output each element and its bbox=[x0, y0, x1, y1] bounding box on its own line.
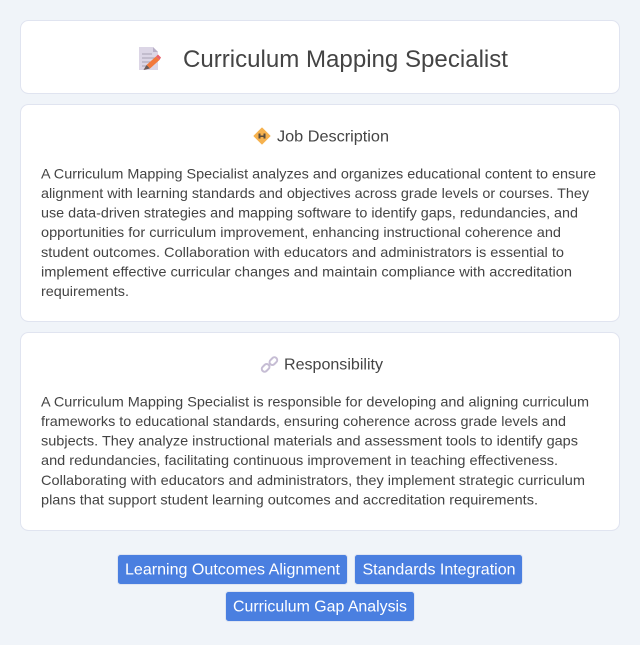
text block: job description: requirements. bbox=[41, 283, 129, 299]
text block: job description: use data-driven strategies and mapping software to identify gaps, redundancies, and bbox=[41, 205, 578, 221]
text block: job description: implement effective curricular changes and maintain compliance with accreditation bbox=[41, 263, 572, 279]
text block: job description: A Curriculum Mapping Specialist analyzes and organizes educational content to ensure bbox=[41, 165, 596, 181]
text block: job description: alignment with learning standards and objectives across grade levels or courses. They bbox=[41, 185, 589, 201]
panel: responsibility bbox=[20, 332, 620, 530]
heading: job description: Job Description bbox=[277, 128, 389, 146]
text block: responsibility: subjects. They analyze instructional materials and assessment tools to identify gaps bbox=[41, 433, 578, 449]
icon: document with pencil bbox=[139, 47, 161, 70]
text block: job description bbox=[41, 165, 596, 299]
icon: chain link bbox=[261, 356, 278, 373]
text block: responsibility: A Curriculum Mapping Specialist is responsible for developing and aligning curriculum bbox=[41, 393, 589, 409]
tag: standards integration: Standards Integration bbox=[362, 562, 516, 578]
tag: curriculum gap analysis bbox=[226, 592, 414, 622]
tag: curriculum gap analysis: Curriculum Gap Analysis bbox=[233, 598, 407, 616]
text block: job description: opportunities for curriculum improvement, enhancing instructional coherence and bbox=[41, 224, 561, 240]
text block: job description: student outcomes. Collaboration with educators and administrators is essential to bbox=[41, 244, 564, 260]
text block: responsibility: frameworks to educational standards, ensuring coherence across grade levels and bbox=[41, 413, 566, 429]
text block: responsibility bbox=[41, 393, 589, 507]
heading: responsibility: Responsibility bbox=[284, 356, 383, 374]
tag: standards integration bbox=[354, 554, 522, 584]
title: Curriculum Mapping Specialist bbox=[183, 46, 508, 73]
panel: title header bbox=[20, 20, 620, 94]
icon: warning diamond bbox=[254, 128, 270, 144]
tag: learning outcomes alignment: Learning Outcomes Alignment bbox=[125, 562, 341, 578]
tag: learning outcomes alignment bbox=[118, 554, 348, 584]
text block: responsibility: Collaborating with educators and administrators, they implement strategic curriculum bbox=[41, 472, 585, 488]
text block: responsibility: and redundancies, facilitating continuous improvement in teaching effectiveness. bbox=[41, 452, 558, 468]
panel: job description bbox=[20, 104, 620, 322]
text block: responsibility: plans that support student learning outcomes and accreditation requirements. bbox=[41, 491, 538, 507]
